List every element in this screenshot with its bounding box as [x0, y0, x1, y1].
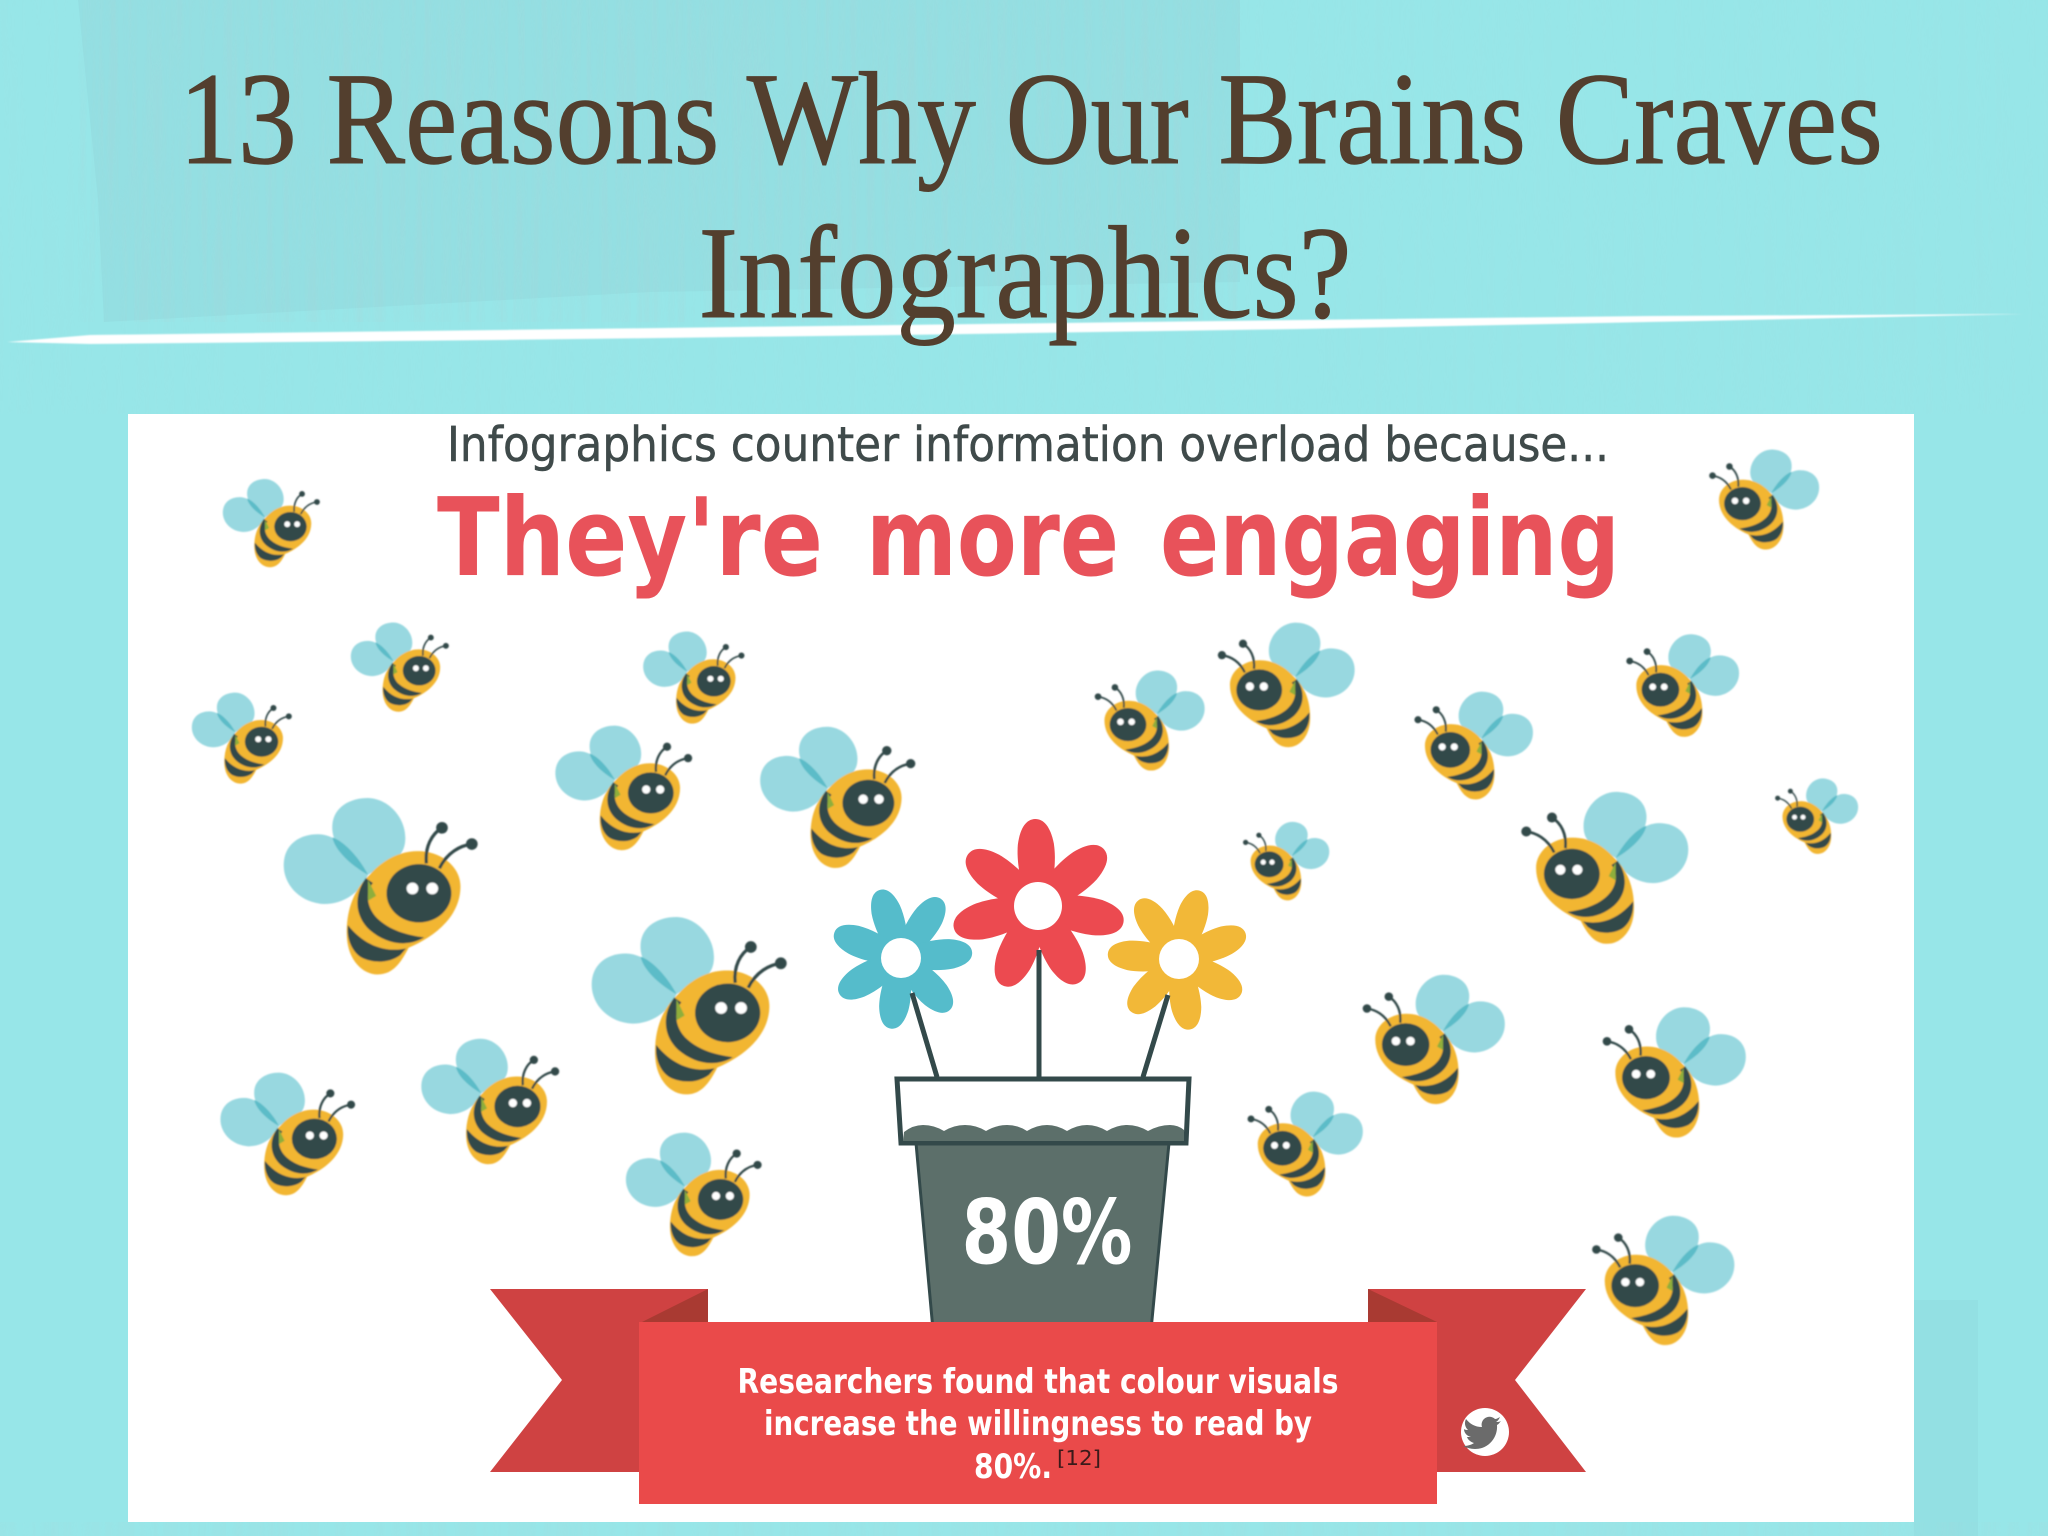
icon: red flower	[949, 818, 1127, 993]
icon: yellow flower	[1107, 886, 1251, 1032]
bee 12	[1709, 450, 1819, 550]
ribbon banner	[490, 1289, 1586, 1504]
bee 18	[1243, 822, 1329, 900]
flower stems	[912, 950, 1168, 1077]
heading: They're more engaging: engaging	[1160, 476, 1620, 601]
bee 2	[351, 622, 449, 712]
bee 19	[1521, 792, 1688, 944]
bee 7	[284, 798, 478, 974]
title	[179, 45, 1883, 346]
bee 8	[592, 917, 787, 1094]
bee 15	[1414, 692, 1533, 799]
bee 16	[1626, 634, 1739, 737]
bee 4	[643, 632, 744, 724]
bee 14	[1218, 623, 1355, 747]
bee 3	[192, 693, 292, 784]
bee 6	[760, 727, 915, 868]
ribbon text: Researchers found that colour visuals	[738, 1362, 1338, 1402]
title: Infographics?	[698, 199, 1352, 346]
ribbon text: 80%.	[974, 1447, 1052, 1487]
bee 17	[1775, 778, 1858, 854]
heading: They're more engaging	[437, 476, 1620, 601]
ribbon text	[738, 1362, 1338, 1487]
ribbon text: increase the willingness to read by	[764, 1404, 1312, 1444]
bee 20	[1363, 975, 1505, 1104]
swarm of bees	[192, 450, 1858, 1345]
subheading: Infographics counter information overload because...	[447, 417, 1609, 473]
title: 13 Reasons Why Our Brains Craves	[179, 45, 1883, 192]
ribbon text: [12]	[1057, 1446, 1101, 1470]
bee 1	[223, 479, 320, 567]
heading: They're more engaging: They're	[437, 476, 823, 601]
heading: They're more engaging: more	[866, 476, 1119, 601]
bee 13	[1095, 671, 1205, 771]
flower pot with 80%	[897, 1079, 1189, 1330]
icon: blue flower	[829, 885, 973, 1031]
flower pot with 80%: 80%	[962, 1180, 1132, 1284]
white brush stroke under the title	[7, 314, 2024, 344]
bee 5	[555, 726, 692, 850]
bee 9	[220, 1073, 355, 1195]
panel: white infographic card	[128, 414, 1914, 1522]
bee 11	[626, 1133, 762, 1256]
icon: twitter bird badge	[1461, 1408, 1509, 1456]
bee 23	[1592, 1216, 1734, 1345]
bee 10	[421, 1039, 559, 1164]
bee 21	[1603, 1007, 1746, 1138]
bee 22	[1248, 1092, 1363, 1196]
